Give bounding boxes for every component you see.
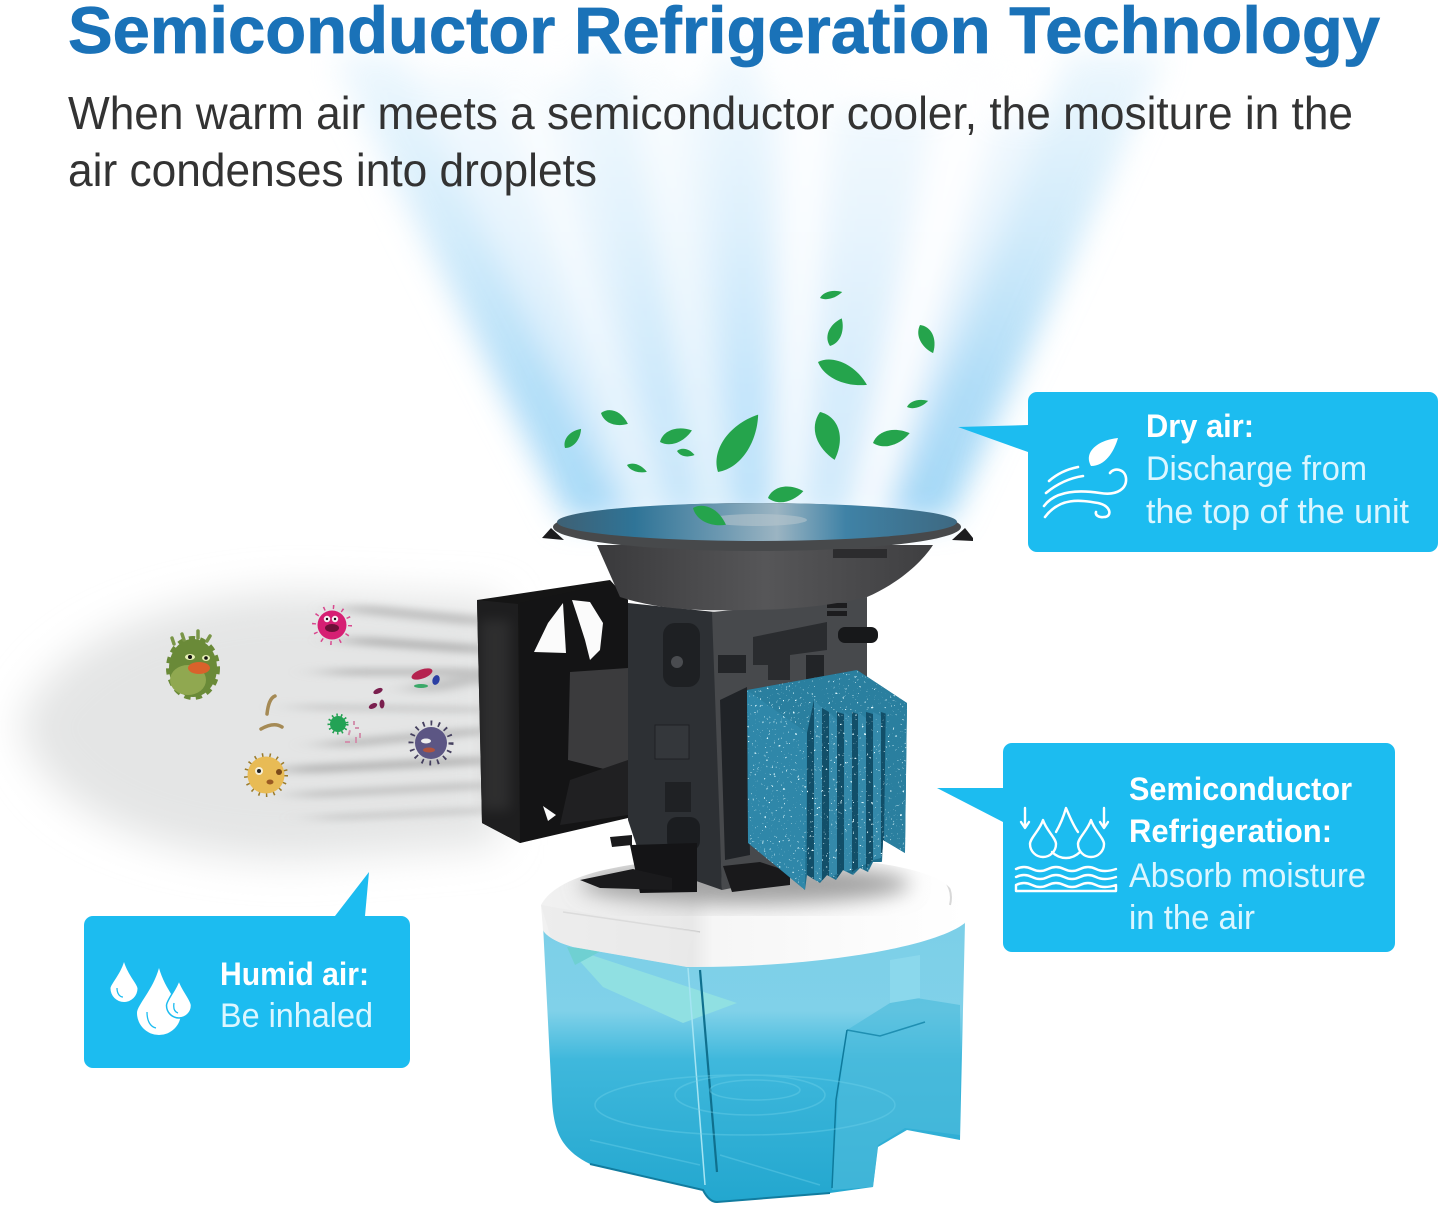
icon: large green germ (169, 631, 217, 697)
icon: condensing drops above water (1016, 808, 1116, 891)
callout: humid air: Be inhaled (220, 997, 373, 1035)
water tank (543, 922, 965, 1202)
icon: yellow germ (246, 755, 286, 795)
callout: semiconductor refrigeration: Absorb moisture (1129, 857, 1366, 895)
icon: pink bacteria specks (345, 721, 361, 743)
icon: pink germ (314, 607, 350, 643)
callout: dry air: Discharge from (1146, 450, 1367, 488)
callout: semiconductor refrigeration: in the air (1129, 899, 1255, 937)
subtitle text block: air condenses into droplets (68, 144, 597, 196)
callout: semiconductor refrigeration: Semiconductor (1129, 771, 1352, 807)
icon: dark red bacteria specks (368, 687, 384, 710)
icon: brown bacteria strands (261, 696, 282, 729)
icon: small green germ (329, 715, 347, 733)
callout: semiconductor refrigeration: Refrigeration: (1129, 813, 1332, 849)
callout: humid air: Humid air: (220, 956, 369, 992)
callout: dry air: the top of the unit (1146, 493, 1410, 531)
callout: semiconductor refrigeration (937, 743, 1395, 952)
callout: dry air: Dry air: (1146, 408, 1254, 444)
heat sink fins (747, 670, 907, 890)
fan gap: white openings between the blades (534, 600, 603, 821)
subtitle text block: When warm air meets a semiconductor cooler, the mositure in the (68, 87, 1353, 139)
icon: three water drops (110, 962, 192, 1035)
subtitle text block (68, 87, 1353, 196)
airflow: dry air fan rising from the top vent (330, 50, 1168, 520)
central housing (580, 597, 878, 893)
fan assembly (477, 580, 628, 843)
tank lid (541, 856, 965, 968)
callout: dry air (958, 392, 1438, 552)
green leaves blown upward (561, 288, 940, 531)
icon: multi-colour microbes (410, 666, 441, 688)
bowl-shaped top vent (542, 503, 973, 610)
callout: humid air (84, 872, 410, 1068)
icon: wind and leaf (1044, 438, 1126, 517)
airflow: humid grey air drawn into the fan (20, 592, 500, 860)
icon: purple germ (411, 723, 451, 763)
